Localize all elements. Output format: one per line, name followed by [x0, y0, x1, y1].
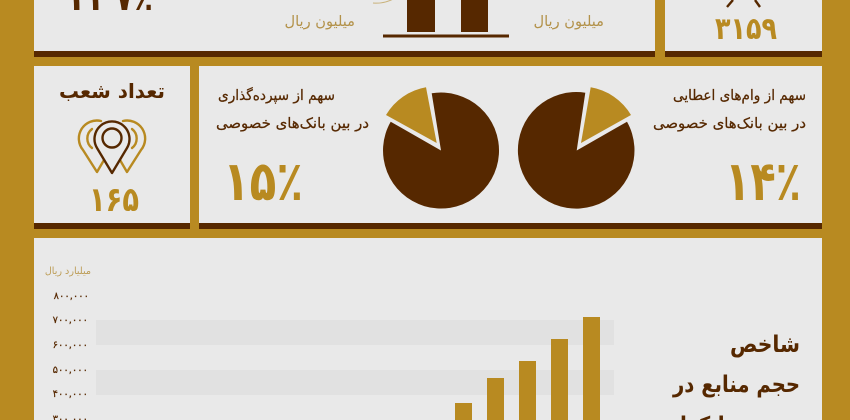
text: loan share: سهم از وام‌های اعطایی — [673, 88, 806, 104]
panel: resources chart — [34, 238, 822, 420]
unit label right: میلیون ریال — [533, 13, 604, 30]
icon: location pins — [79, 121, 145, 173]
y axis labels — [53, 291, 89, 420]
text: loan share — [653, 88, 806, 132]
loan share value: ۱۴٪ — [725, 149, 801, 213]
heading: resources index: شاخص — [730, 332, 800, 358]
y axis labels: ۸۰۰,۰۰۰ — [54, 291, 89, 302]
panel: top right count — [665, 0, 822, 57]
text: deposit share — [216, 87, 369, 132]
count value: ۳۱۵۹ — [715, 11, 777, 47]
panel: market shares — [199, 66, 822, 229]
panel: top financial figures — [34, 0, 655, 57]
y axis labels: ۵۰۰,۰۰۰ — [53, 365, 88, 376]
pie chart: deposit share — [383, 87, 499, 209]
y axis labels: ۷۰۰,۰۰۰ — [53, 315, 88, 326]
heading: branch count: تعداد شعب — [59, 79, 165, 103]
heading: resources index — [650, 332, 800, 420]
icon fragment — [727, 0, 760, 7]
text: loan share: در بین بانک‌های خصوصی — [653, 116, 806, 132]
deposit share value: ۱۵٪ — [223, 149, 303, 213]
y axis labels: ۴۰۰,۰۰۰ — [53, 389, 88, 400]
text: deposit share: سهم از سپرده‌گذاری — [218, 87, 335, 104]
unit label left: میلیون ریال — [284, 13, 355, 30]
icon: bank columns — [373, 0, 509, 38]
text: deposit share: در بین بانک‌های خصوصی — [216, 116, 369, 132]
pie chart: loan share — [518, 87, 634, 209]
bars — [455, 317, 600, 420]
panel: branch count — [34, 66, 190, 229]
branch count value: ۱۶۵ — [89, 180, 139, 220]
bar chart: resources — [45, 266, 614, 420]
y axis labels: ۶۰۰,۰۰۰ — [53, 340, 88, 351]
heading: resources index: حجم منابع در — [672, 372, 800, 398]
y axis unit: میلیارد ریال — [45, 266, 91, 277]
